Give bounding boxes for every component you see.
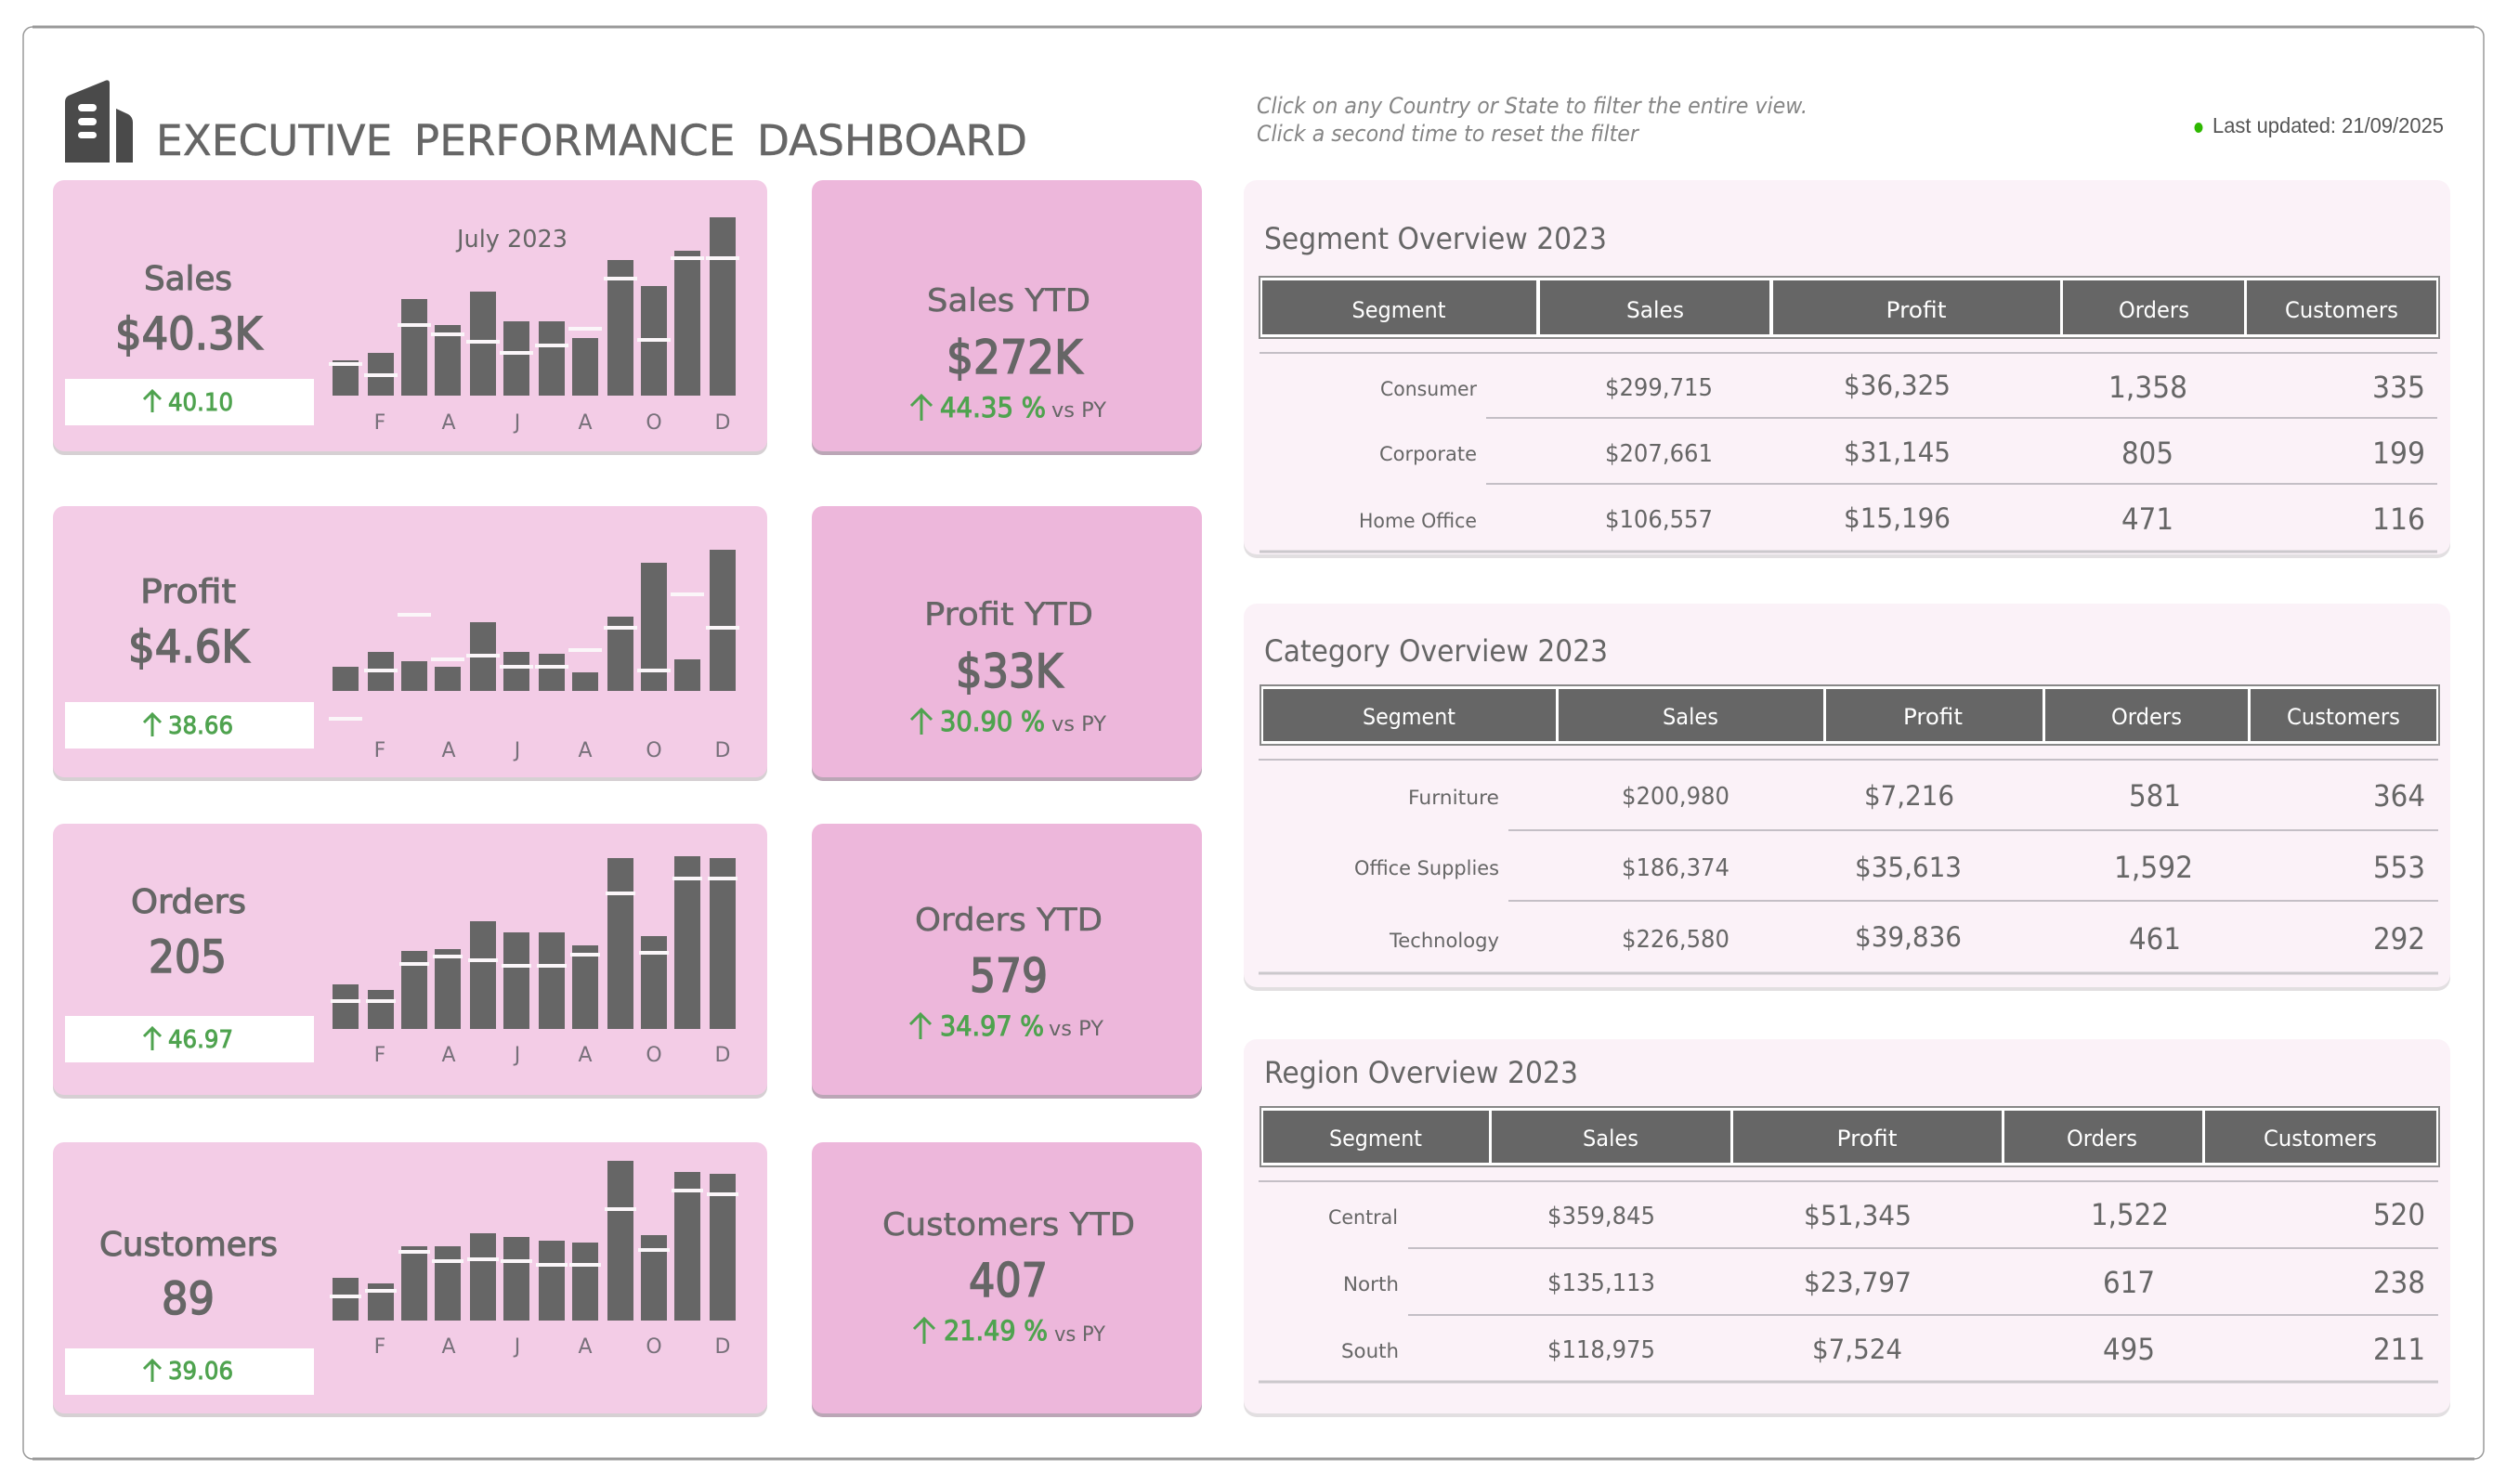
row: corporate [1379,436,2425,471]
orders YTD change: vs PY [1049,1018,1104,1041]
title: EXECUTIVE PERFORMANCE DASHBOARD [156,116,1027,165]
profit YTD label: Profit YTD [924,596,1093,633]
row: central: 520 [2373,1197,2425,1232]
panel: sales KPI [53,180,767,455]
orders YTD change: 34.97 % [940,1010,1044,1042]
row: technology: Technology [1389,930,1499,952]
profit label: Profit [140,573,236,611]
row: consumer: $36,325 [1844,370,1951,401]
bar chart: profit by month: A [441,739,456,762]
category table header: Segment [1363,704,1455,730]
row: central: $51,345 [1804,1200,1912,1231]
region table header: Sales [1583,1126,1638,1152]
bar chart: customers by month: O [646,1335,662,1359]
row: central: Central [1328,1206,1398,1229]
row: consumer: $299,715 [1605,374,1713,402]
row: consumer: Consumer [1380,378,1477,400]
row: technology: 292 [2373,921,2425,957]
customers delta badge: 39.06 [168,1358,233,1386]
bar chart: orders by month [331,856,737,1067]
row: north: $23,797 [1804,1267,1912,1298]
bar chart: orders by month: O [646,1044,662,1067]
row: home office: $106,557 [1605,506,1713,534]
row: south: $7,524 [1812,1334,1902,1365]
category table header: Profit [1903,704,1963,730]
row: furniture: Furniture [1408,787,1499,809]
row: consumer: 335 [2372,370,2425,405]
row: home office: 116 [2372,501,2425,537]
row: office supplies: 1,592 [2114,850,2193,885]
category overview heading: Category Overview 2023 [1264,633,1608,669]
bar chart: profit by month [329,550,739,762]
bar chart: orders by month: D [715,1044,730,1067]
customers YTD value: 407 [969,1254,1048,1308]
orders YTD change [910,1010,1104,1042]
bar chart: customers by month [330,1161,738,1359]
bar chart: sales by month: F [374,411,385,435]
region table header: Orders [2067,1126,2137,1152]
row: central: $359,845 [1547,1203,1655,1230]
row: north: 238 [2373,1265,2425,1300]
customers label: Customers [99,1226,278,1264]
row: south: South [1341,1340,1399,1362]
row: south: 495 [2103,1332,2155,1367]
bar chart: profit by month: O [646,739,662,762]
customers YTD label: Customers YTD [882,1206,1135,1243]
panel: orders YTD [812,824,1202,1099]
row: central: 1,522 [2091,1197,2169,1232]
sales delta badge: 40.10 [168,389,233,417]
category table header: Orders [2111,704,2182,730]
bar chart: orders by month: A [441,1044,456,1067]
profit YTD change [911,706,1107,737]
row: technology: 461 [2129,921,2181,957]
segment table header: Segment [1352,297,1445,323]
sales label: Sales [144,260,232,298]
region table header: Segment [1329,1126,1422,1152]
instructions text [1257,93,1808,147]
segment table rows [1260,353,2437,552]
segment table header: Sales [1626,297,1684,323]
row: technology: $39,836 [1855,921,1962,953]
segment table header: Customers [2285,297,2398,323]
panel: category overview [1244,604,2450,991]
bar chart: orders by month: A [578,1044,593,1067]
profit value: $4.6K [128,621,250,673]
panel: profit YTD [812,506,1202,781]
row: north: North [1343,1273,1399,1295]
sales YTD change [911,392,1107,423]
sales delta badge [65,379,314,425]
bar chart: customers by month: A [578,1335,593,1359]
bar chart: profit by month: J [513,739,520,762]
bar chart: customers by month: D [715,1335,730,1359]
profit delta badge [65,702,314,749]
orders delta badge [65,1016,314,1062]
profit YTD change: vs PY [1051,713,1107,736]
segment table header: Orders [2119,297,2189,323]
row: central [1328,1197,2425,1232]
row: south: 211 [2373,1332,2425,1367]
customers YTD change: 21.49 % [944,1315,1048,1347]
orders YTD label: Orders YTD [915,902,1103,939]
category table rows [1259,760,2438,973]
orders value: 205 [149,931,227,983]
panel: profit KPI [53,506,767,781]
row: corporate: 199 [2372,436,2425,471]
month label: July 2023 [455,226,568,254]
row: corporate: $31,145 [1844,436,1951,468]
icon: building logo [65,80,133,163]
sales YTD value: $272K [946,331,1083,384]
bar chart: sales by month: D [715,411,730,435]
last updated indicator: Last updated: 21/09/2025 [2212,113,2444,137]
bar chart: sales by month [329,217,739,435]
row: furniture: $7,216 [1864,780,1954,812]
customers YTD change [914,1315,1106,1347]
bar chart: customers by month: A [441,1335,456,1359]
bar chart: profit by month: F [374,739,385,762]
row: office supplies [1354,850,2425,885]
bar chart: profit by month: A [578,739,593,762]
row: corporate: Corporate [1379,443,1477,465]
row: office supplies: $186,374 [1622,854,1729,882]
bar chart: sales by month: A [441,411,456,435]
row: home office [1359,501,2425,537]
panel: customers KPI [53,1142,767,1417]
category table header: Sales [1663,704,1718,730]
bar chart: orders by month: J [513,1044,520,1067]
row: home office: Home Office [1359,510,1477,532]
bar chart: sales by month: J [513,411,520,435]
row: north: $135,113 [1547,1269,1655,1297]
row: south: $118,975 [1547,1336,1655,1364]
instructions text: Click a second time to reset the filter [1257,121,1640,147]
row: corporate: $207,661 [1605,440,1713,468]
bar chart: profit by month: D [715,739,730,762]
row: home office: $15,196 [1844,502,1951,534]
bar chart: sales by month: A [578,411,593,435]
segment overview heading: Segment Overview 2023 [1264,221,1607,256]
row: office supplies: Office Supplies [1354,857,1499,879]
row: furniture: 581 [2129,778,2181,814]
row: technology: $226,580 [1622,926,1729,954]
profit YTD value: $33K [956,644,1064,698]
category table header [1260,685,2439,745]
customers YTD change: vs PY [1054,1323,1106,1347]
region table header [1260,1107,2439,1166]
bar chart: orders by month: F [374,1044,385,1067]
sales value: $40.3K [115,308,263,360]
sales YTD change: vs PY [1051,399,1107,423]
orders YTD value: 579 [970,949,1048,1003]
customers value: 89 [162,1273,215,1325]
row: office supplies: 553 [2373,850,2425,885]
bar chart: sales by month: O [646,411,662,435]
panel: segment overview [1244,180,2450,558]
row: home office: 471 [2121,501,2173,537]
row: furniture: 364 [2373,778,2425,814]
panel: sales YTD [812,180,1202,455]
panel: customers YTD [812,1142,1202,1417]
row: consumer [1380,370,2425,405]
panel: region overview [1244,1039,2450,1417]
profit YTD change: 30.90 % [940,706,1045,737]
row: furniture [1408,778,2425,814]
row: consumer: 1,358 [2108,370,2187,405]
bar chart: customers by month: J [513,1335,520,1359]
bar chart: customers by month: F [374,1335,385,1359]
row: office supplies: $35,613 [1855,852,1962,883]
instructions text: Click on any Country or State to filter the entire view. [1257,93,1808,119]
profit delta badge: 38.66 [168,712,233,740]
panel: orders KPI [53,824,767,1099]
row: south [1341,1332,2425,1367]
row: north: 617 [2103,1265,2155,1300]
row: furniture: $200,980 [1622,783,1729,811]
category table header: Customers [2287,704,2400,730]
region table rows [1259,1181,2438,1382]
row: corporate: 805 [2121,436,2173,471]
sales YTD label: Sales YTD [927,282,1090,319]
segment table header: Profit [1886,297,1947,323]
sales YTD change: 44.35 % [940,392,1046,423]
orders label: Orders [131,883,246,921]
customers delta badge [65,1348,314,1395]
segment table header [1260,277,2439,338]
orders delta badge: 46.97 [168,1026,233,1054]
row: technology [1389,921,2425,957]
row: north [1343,1265,2425,1300]
region table header: Customers [2264,1126,2377,1152]
region overview heading: Region Overview 2023 [1264,1055,1578,1090]
region table header: Profit [1837,1126,1897,1152]
